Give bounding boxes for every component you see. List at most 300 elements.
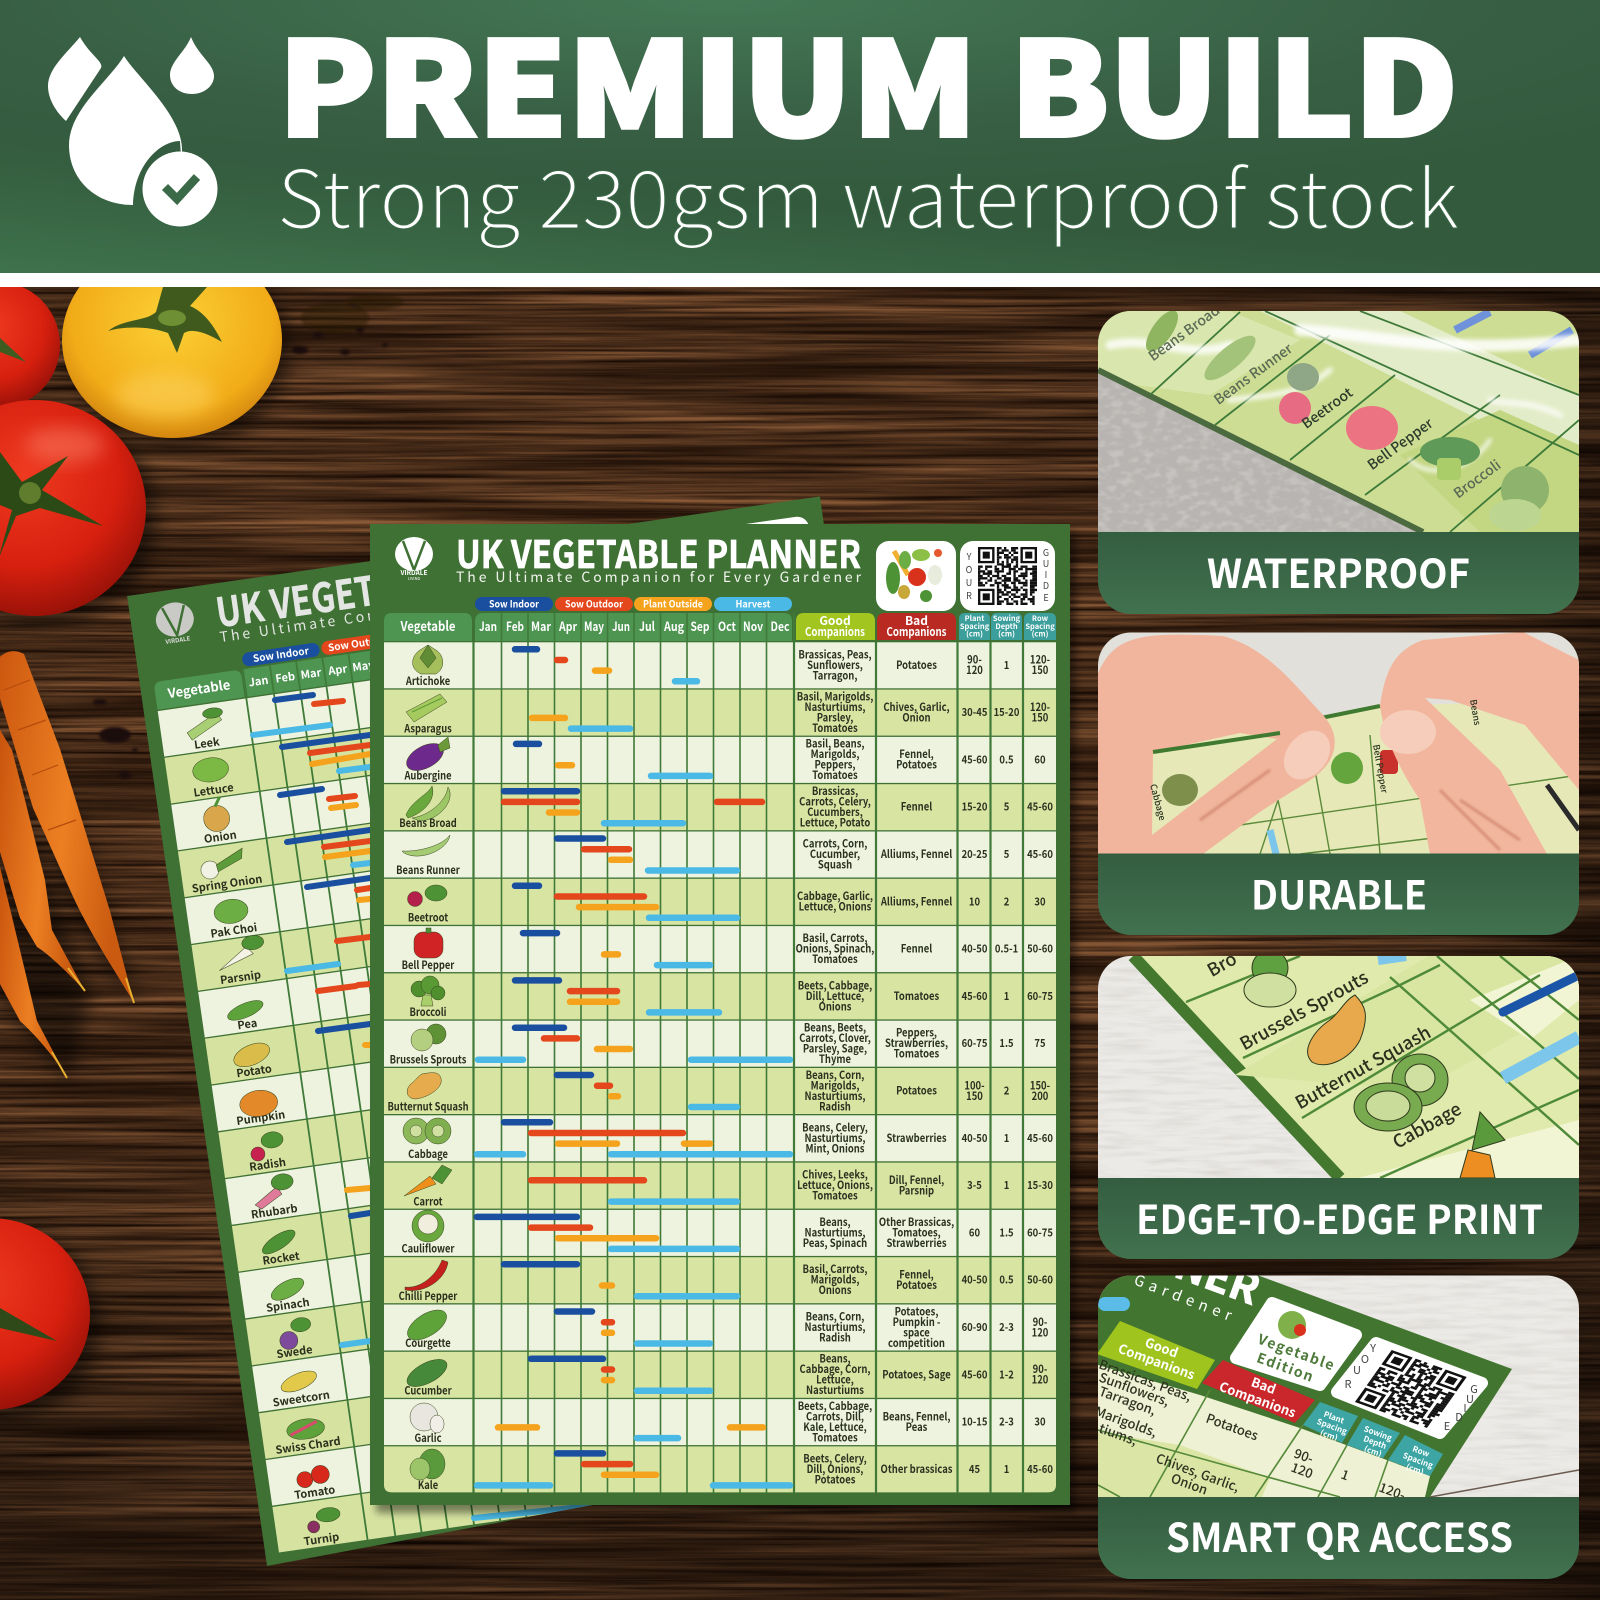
tile: QR: D	[1455, 1409, 1463, 1425]
vegetable names: Chilli Pepper	[399, 1287, 458, 1303]
good companions column: Dill, Onions,	[807, 1460, 863, 1476]
sowing depth column: 0.5	[999, 1271, 1014, 1287]
tile: vegetable edition: Edition	[1254, 1348, 1317, 1387]
good companions column: Basil, Marigolds,	[797, 688, 873, 704]
bad companions column: Potatoes	[896, 1082, 937, 1098]
table header: Companions	[805, 623, 865, 640]
tomato: bottom left	[0, 1218, 90, 1410]
bad companions header	[1202, 1360, 1315, 1423]
row spacing column: 120-	[1030, 698, 1050, 714]
icon: butternut squash	[407, 1073, 441, 1099]
photo: QR corner of chart: (cm)	[1405, 1461, 1425, 1478]
good companions column: Marigolds,	[811, 1076, 859, 1093]
back header labels: Mar	[300, 664, 323, 683]
row spacing column: 150	[1032, 661, 1048, 677]
good companions column: Carrots, Celery,	[799, 793, 871, 809]
back vegetable labels: Swede	[275, 1341, 314, 1362]
poster title fragment: Gardener	[1131, 1269, 1235, 1326]
row spacing column: 150	[1032, 709, 1048, 725]
icon: artichoke	[413, 645, 443, 674]
photo: QR corner of chart: Row	[1411, 1444, 1431, 1460]
yellow tomato	[62, 287, 282, 438]
chart text in photo: Tarragon,	[1097, 1381, 1159, 1419]
bad companions column: Peas	[906, 1418, 927, 1434]
bad companions column: Tomatoes	[894, 1045, 939, 1061]
chart labels in photo: Brussels Sprouts	[1235, 964, 1373, 1056]
bad companions column: Strawberries	[886, 1129, 947, 1145]
row spacing column	[1027, 651, 1053, 1476]
tile: vegetable edition: Vegetable	[1254, 1329, 1338, 1376]
back vegetable labels: Spinach	[265, 1294, 311, 1316]
vegetable names: Beans Runner	[396, 861, 460, 877]
bad companions column	[879, 656, 954, 1476]
bad companions column: Potatoes	[896, 756, 937, 772]
good companions column: Chives, Leeks,	[802, 1166, 868, 1182]
table header: Spacing	[1025, 621, 1055, 632]
plant spacing column: 20-25	[962, 845, 987, 861]
back rows	[158, 680, 370, 1506]
panel: durable	[1098, 632, 1579, 936]
legend	[475, 596, 792, 611]
photo: QR corner of chart: Sowing	[1362, 1423, 1394, 1444]
back vegetable labels	[192, 737, 340, 1546]
QR side labels: U	[1043, 557, 1049, 570]
row spacing column: 90-	[1033, 1313, 1048, 1329]
bad companions column: Fennel	[901, 798, 932, 814]
label: DURABLE	[1251, 864, 1427, 922]
label bar	[1098, 532, 1579, 614]
icon: asparagus	[406, 694, 447, 722]
tile: QR: Y	[1369, 1340, 1376, 1356]
table header: Oct	[718, 616, 737, 635]
bars: plant outside	[498, 671, 763, 1475]
table header: Bad	[905, 612, 928, 629]
chart text in photo: Onion	[1169, 1468, 1211, 1499]
QR side labels: Y	[966, 550, 972, 563]
plant spacing column: 3-5	[967, 1176, 982, 1192]
photo: QR corner of chart: (cm)	[1363, 1443, 1383, 1460]
good companions column: Mint, Onions	[806, 1139, 864, 1156]
vegetable names: Broccoli	[409, 1003, 447, 1019]
tile: QR: G	[1470, 1381, 1478, 1397]
icon: bell pepper	[414, 928, 443, 958]
table header: Dec	[770, 616, 790, 635]
sowing depth column: 2	[1004, 1082, 1009, 1098]
vegetable names	[387, 672, 469, 1492]
QR side labels: G	[1043, 546, 1049, 559]
carrots	[0, 651, 134, 1078]
legend: Sow Outdoor	[565, 596, 624, 610]
sowing depth column: 5	[1004, 798, 1009, 814]
back legend: Sow Outdoor	[327, 630, 394, 654]
bad companions column: Potatoes	[896, 1276, 937, 1292]
row spacing column: 120-	[1030, 651, 1050, 667]
label bar	[1098, 854, 1579, 936]
photo: QR corner of chart: Plant	[1322, 1409, 1346, 1427]
row spacing column: 60-75	[1027, 987, 1053, 1003]
icon: beans broad	[406, 786, 450, 821]
plant spacing column: 60-90	[962, 1318, 987, 1334]
table header: Feb	[506, 616, 524, 635]
good companions column: Onions	[819, 998, 851, 1014]
good companions column: Cabbage, Corn,	[800, 1360, 870, 1376]
icon: cauliflower	[412, 1210, 444, 1242]
row spacing column: 45-60	[1027, 1129, 1053, 1145]
QR side labels: R	[966, 589, 972, 602]
table header: Vegetable	[400, 615, 456, 635]
plant spacing column: 150	[966, 1087, 983, 1103]
icon: carrot	[404, 1165, 452, 1196]
row spacing column: 75	[1034, 1034, 1046, 1050]
spacing headers	[1303, 1402, 1443, 1476]
photo: hands flexing chart	[1098, 632, 1579, 854]
good companions column: Lettuce,	[816, 1371, 854, 1387]
good companions column: Beets, Cabbage,	[798, 977, 872, 993]
icon: beans runner	[402, 835, 450, 856]
chart text in photo: 90-	[1292, 1443, 1317, 1468]
good companions column: Dill, Lettuce,	[806, 987, 864, 1003]
tile: vegetable edition	[1236, 1303, 1356, 1387]
bad companions column: Pumpkin -	[893, 1313, 941, 1329]
good companions column: Cucumber,	[810, 845, 860, 861]
good companions column: Beans, Beets,	[804, 1019, 866, 1035]
row spacing column: 45-60	[1027, 798, 1053, 814]
table header: Sowing	[993, 613, 1020, 624]
table header: Good	[819, 612, 851, 629]
vegetable names: Kale	[418, 1476, 438, 1492]
sowing depth column: 1	[1004, 1129, 1009, 1145]
bars: sow indoor	[477, 649, 603, 1453]
icon: courgette	[403, 1304, 451, 1346]
vegetable names: Carrot	[413, 1192, 443, 1209]
good companions column: Cabbage, Garlic,	[797, 887, 873, 903]
back legend	[242, 634, 370, 666]
bad companions column: Fennel	[901, 940, 932, 956]
back vegetable labels: Lettuce	[192, 779, 235, 801]
good companions column: Onions, Spinach,	[796, 940, 874, 956]
back logo	[156, 602, 194, 644]
bad companions header: Bad	[1249, 1372, 1279, 1398]
tile: vegetable illustration	[876, 541, 956, 611]
good companions column: Beets, Cabbage,	[798, 1397, 872, 1413]
illustrated vegetables in photo	[1244, 950, 1505, 1178]
vegetable names: Cucumber	[404, 1382, 452, 1398]
good companions column: Potatoes	[815, 1471, 855, 1487]
chart labels in photo: Beans	[1467, 698, 1484, 726]
back vegetable labels: Potato	[235, 1060, 273, 1081]
good companions column: Lettuce, Onions,	[797, 1176, 873, 1192]
plant spacing column: 45	[969, 1460, 980, 1476]
plant spacing column: 40-50	[962, 1129, 987, 1145]
illustrated vegetables in photo	[1140, 306, 1549, 531]
good companions column: Beans, Corn,	[806, 1066, 864, 1082]
plant spacing column: 45-60	[962, 751, 987, 767]
bad companions column: Tomatoes	[894, 987, 939, 1003]
photo: QR corner of chart: Depth	[1362, 1433, 1388, 1452]
plant spacing column: 30-45	[962, 703, 987, 719]
back vegetable labels: Rhubarb	[250, 1200, 299, 1223]
tile: QR: E	[1444, 1418, 1450, 1434]
good companions column: Radish	[819, 1329, 851, 1345]
plant spacing column: 10-15	[962, 1413, 987, 1429]
QR side labels	[966, 546, 1049, 604]
chart text in photo: Chives, Garlic,	[1154, 1448, 1243, 1496]
back vegetable labels: Turnip	[303, 1529, 340, 1549]
label: EDGE-TO-EDGE PRINT	[1136, 1188, 1543, 1246]
bad companions column: Strawberries,	[885, 1034, 948, 1050]
good companions column: Cucumbers,	[807, 803, 863, 819]
table rows	[384, 642, 1056, 1492]
row spacing column: 60-75	[1027, 1224, 1053, 1240]
good companions header	[1097, 1321, 1215, 1389]
photo: QR corner of chart: (cm)	[1319, 1427, 1339, 1444]
good companions column: Marigolds,	[811, 1271, 859, 1287]
poster title fragment: NER	[1168, 1231, 1269, 1318]
grid lines	[502, 613, 766, 1493]
QR side labels: U	[966, 576, 972, 589]
good companions column: Tomatoes	[812, 766, 858, 782]
back tiles	[746, 516, 808, 524]
row spacing column: 30	[1034, 892, 1046, 909]
panel: smart QR access	[1093, 1231, 1579, 1579]
QR side labels: I	[1045, 568, 1047, 581]
front poster shadow	[376, 532, 1076, 1513]
good companions column: Lettuce, Potato	[800, 814, 870, 830]
bars: harvest	[477, 681, 790, 1485]
good companions column: Peppers,	[814, 756, 856, 772]
tomato: top left	[0, 282, 60, 408]
icon: chilli pepper	[405, 1260, 448, 1291]
back vegetable labels: Rocket	[261, 1247, 301, 1269]
chart labels in photo	[1147, 698, 1484, 822]
vegetable names: Asparagus	[403, 719, 452, 736]
icon: beetroot	[408, 885, 447, 906]
bad companions column: Fennel,	[899, 1266, 934, 1282]
row spacing column: 45-60	[1027, 1460, 1053, 1476]
back vegetable icons	[178, 705, 348, 1535]
table header: Mar	[531, 616, 551, 635]
chart text in photo: Brassicas, Peas,	[1097, 1354, 1195, 1405]
back poster bars	[253, 695, 601, 1518]
good companions column: Nasturtiums,	[805, 1129, 865, 1145]
back vegetable labels: Swiss Chard	[274, 1433, 342, 1458]
panel: waterproof	[1098, 300, 1579, 614]
plant spacing column: 60	[969, 1224, 980, 1240]
vegetable icons	[402, 645, 452, 1480]
bad companions column: Chives, Garlic,	[883, 698, 950, 714]
shadows under produce	[0, 252, 290, 1421]
back vegetable labels: Onion	[203, 826, 238, 847]
chart labels in photo	[1202, 945, 1466, 1154]
vegetable names: Beetroot	[408, 909, 449, 925]
legend: Harvest	[736, 596, 771, 610]
table header: Depth	[995, 621, 1018, 632]
back header labels: Apr	[326, 660, 348, 679]
vegetable names: Garlic	[415, 1429, 442, 1445]
vegetable names: Bell Pepper	[402, 956, 455, 972]
icon: garlic	[410, 1403, 444, 1433]
plant spacing column: 10	[969, 892, 980, 909]
panel: edge-to-edge print	[1098, 945, 1579, 1259]
photo: chart on white wood	[1098, 945, 1579, 1178]
row spacing column: 90-	[1033, 1360, 1048, 1376]
vegetable names: Courgette	[405, 1334, 451, 1350]
good companions column: Beans, Celery,	[802, 1118, 868, 1135]
plant spacing column: 40-50	[962, 940, 987, 956]
back logo: VIRDALE	[164, 633, 191, 646]
good companions column: Marigolds,	[811, 745, 859, 761]
good companions column	[796, 645, 874, 1487]
good companions column: Tomatoes	[812, 950, 858, 966]
sowing depth column: 5	[1004, 845, 1009, 861]
plant spacing column: 40-50	[962, 1271, 987, 1287]
good companions column: Kale, Lettuce,	[803, 1418, 867, 1434]
good companions column: Squash	[818, 856, 852, 872]
table header: Companions	[886, 623, 947, 640]
sowing depth column: 1.5	[999, 1224, 1014, 1240]
back vegetable labels: Parsnip	[219, 966, 262, 988]
chart labels in photo: Cabbage	[1388, 1095, 1466, 1154]
row spacing column: 120	[1032, 1323, 1048, 1340]
vegetable names: Artichoke	[405, 672, 450, 688]
QR side labels: E	[1043, 591, 1049, 604]
chart labels in photo: Butternut Squash	[1290, 1019, 1435, 1115]
back legend: Sow Indoor	[252, 642, 310, 665]
sowing depth column: 2	[1004, 892, 1009, 909]
table header: Spacing	[960, 621, 990, 632]
row spacing column: 200	[1032, 1087, 1048, 1103]
photo: QR corner of chart: Spacing	[1401, 1450, 1435, 1471]
good companions column: Nasturtiums	[806, 1381, 864, 1397]
bad companions header: Companions	[1217, 1376, 1299, 1421]
chart text in photo: 1	[1339, 1464, 1352, 1484]
good companions column: Brassicas,	[812, 782, 858, 798]
row spacing column: 15-30	[1027, 1176, 1053, 1192]
chart text in photo: Marigolds,	[1093, 1401, 1160, 1441]
row spacing column: 45-60	[1027, 845, 1053, 861]
legend: Plant Outside	[643, 596, 703, 610]
tile: QR: U	[1466, 1391, 1474, 1407]
sowing depth column: 1	[1004, 1176, 1009, 1192]
back vegetable labels: Leek	[193, 733, 221, 753]
good companions column: Thyme	[819, 1050, 851, 1066]
poster title: UK VEGETABLE PLANNER	[456, 524, 861, 579]
bad companions column: Onion	[902, 709, 931, 725]
photo: QR corner of chart: Spacing	[1315, 1416, 1349, 1437]
chart labels in photo	[1144, 300, 1505, 503]
icon: aubergine	[402, 737, 450, 776]
sowing depth column: 1	[1004, 656, 1009, 672]
label bar	[1098, 1178, 1579, 1259]
QR side labels: D	[1043, 579, 1049, 592]
row spacing column: 120	[1032, 1371, 1048, 1387]
sowing depth column: 1.5	[999, 1034, 1014, 1050]
back vegetable labels: Pumpkin	[235, 1106, 286, 1129]
chart text in photo: 120-	[1377, 1477, 1409, 1504]
chart text in photo: 120	[1289, 1457, 1316, 1482]
QR side labels: O	[966, 563, 973, 576]
bars: sow outdoor	[504, 660, 762, 1464]
sowing depth column: 0.5	[999, 751, 1014, 767]
good companions column: Tomatoes	[812, 1429, 858, 1445]
good companions column: Carrots, Dill,	[806, 1408, 864, 1424]
chart text in photo: tiums,	[1097, 1418, 1140, 1449]
chart labels in photo: Bell Pepper	[1363, 413, 1437, 475]
good companions header: Good	[1143, 1332, 1181, 1362]
row spacing column: 150-	[1030, 1076, 1050, 1093]
good companions column: Onions	[819, 1281, 851, 1297]
good companions column: Peas, Spinach	[803, 1234, 867, 1250]
icon: cucumber	[403, 1354, 451, 1392]
plant spacing column	[962, 651, 987, 1476]
chart labels in photo: Bro	[1202, 945, 1241, 983]
chart labels in photo: Beans Broad	[1144, 300, 1224, 366]
good companions column: Lettuce, Onions	[799, 898, 871, 914]
header banner	[0, 0, 1600, 287]
plant spacing column: 45-60	[962, 987, 987, 1003]
back vegetable labels: Tomato	[293, 1481, 336, 1503]
back header labels: Jun	[379, 653, 401, 672]
table header: Nov	[743, 616, 764, 635]
good companions column: Beets, Celery,	[803, 1450, 867, 1466]
bad companions column: Other brassicas	[881, 1460, 952, 1476]
sowing depth column: 1	[1004, 1460, 1009, 1476]
table header: Apr	[558, 616, 577, 635]
sowing depth column: 1-2	[999, 1365, 1014, 1382]
sowing depth column: 1	[1004, 987, 1009, 1003]
chart text in photo: Potatoes	[1204, 1408, 1261, 1444]
photo: QR corner of chart	[1093, 1231, 1579, 1504]
bad companions column: Fennel,	[899, 745, 934, 761]
bad companions column: space	[903, 1323, 930, 1340]
plant spacing column: 15-20	[962, 798, 987, 814]
vegetable names: Cauliflower	[401, 1240, 455, 1256]
chart labels in photo: Bell Pepper	[1370, 743, 1391, 794]
chart labels in photo: Beetroot	[1297, 382, 1357, 433]
good companions column: Nasturtiums,	[805, 1318, 865, 1334]
vegetable names: Cabbage	[408, 1145, 448, 1161]
row spacing column: 50-60	[1027, 940, 1053, 956]
bad companions column: Beans, Fennel,	[883, 1408, 950, 1424]
good companions column: Nasturtiums,	[805, 698, 865, 714]
back subtitle: The Ultimate Companion for Every Gardener	[218, 569, 623, 647]
tile: QR: I	[1463, 1400, 1467, 1416]
good companions column: Tarragon,	[813, 666, 857, 683]
good companions column: Tomatoes	[812, 719, 858, 735]
chart labels in photo: Cabbage	[1147, 782, 1169, 822]
good companions header: Companions	[1116, 1338, 1198, 1383]
good companions column: Tomatoes	[812, 1187, 858, 1203]
poster title fragment	[1098, 1231, 1269, 1326]
logo: VIRDALE	[399, 567, 428, 577]
bad companions column: Tomatoes,	[892, 1224, 941, 1240]
back header labels: Jan	[248, 672, 269, 690]
bad companions column: Alliums, Fennel	[880, 892, 952, 909]
tile: QR: U	[1353, 1362, 1361, 1378]
sowing depth column: 15-20	[994, 703, 1019, 719]
good companions column: Beans, Corn,	[806, 1308, 864, 1324]
back vegetable labels: Pea	[236, 1015, 258, 1033]
logo: LIVING	[408, 576, 420, 582]
good companions column: Beans,	[819, 1213, 851, 1229]
sowing depth column	[994, 656, 1019, 1476]
logo	[395, 537, 433, 582]
poster subtitle: The Ultimate Companion for Every Gardener	[456, 567, 862, 587]
back vegetable labels: Spring Onion	[191, 871, 263, 897]
bad companions column: Parsnip	[899, 1182, 934, 1198]
back vegetable labels: Sweetcorn	[272, 1387, 331, 1411]
icon: cabbage	[403, 1118, 451, 1144]
